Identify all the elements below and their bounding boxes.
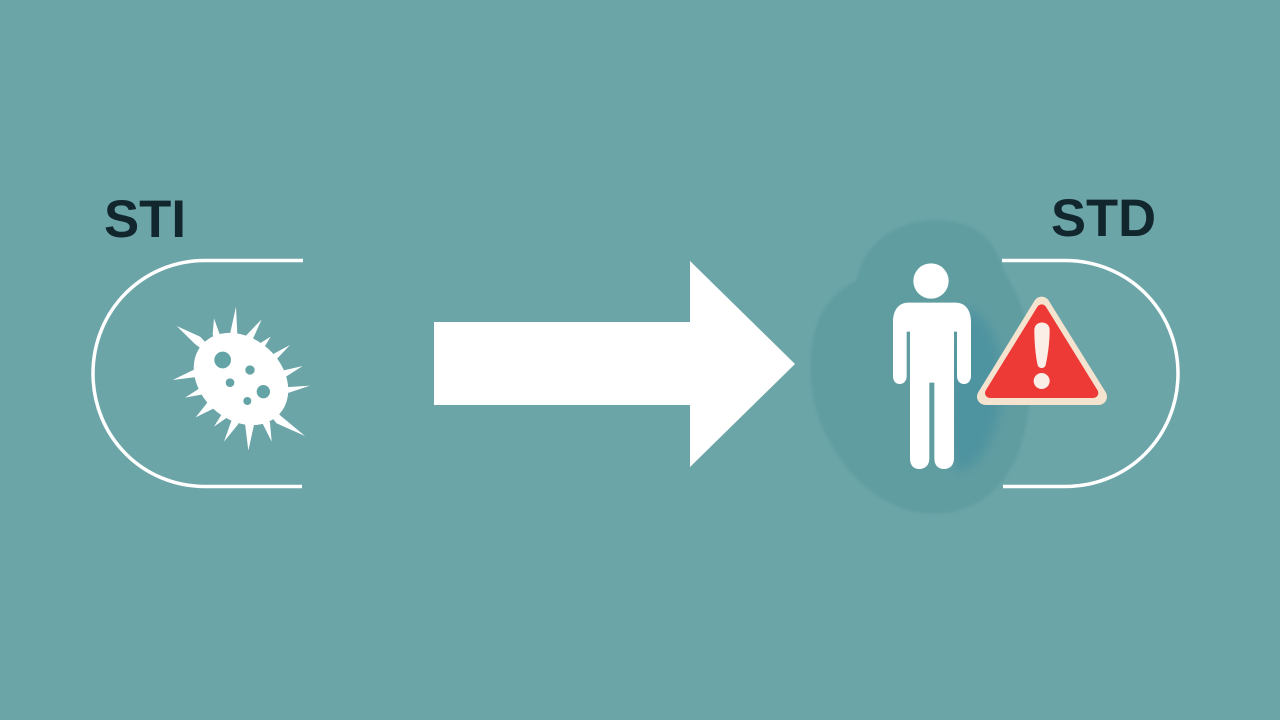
person figure: [893, 263, 971, 469]
affected-area blob: [810, 220, 1031, 514]
heading: STI: STI: [104, 190, 186, 249]
arrow: [434, 261, 795, 467]
panel: STD right bracket: [1002, 260, 1178, 486]
heading: STD: STD: [1051, 189, 1156, 248]
icon: person with affected-area blob: [810, 220, 1031, 514]
exclamation mark: [1034, 322, 1050, 389]
icon: warning triangle: [985, 305, 1099, 397]
panel: STI left bracket: [93, 260, 303, 486]
inner shadow: [947, 307, 1002, 473]
icon: bacterium: [173, 307, 310, 451]
